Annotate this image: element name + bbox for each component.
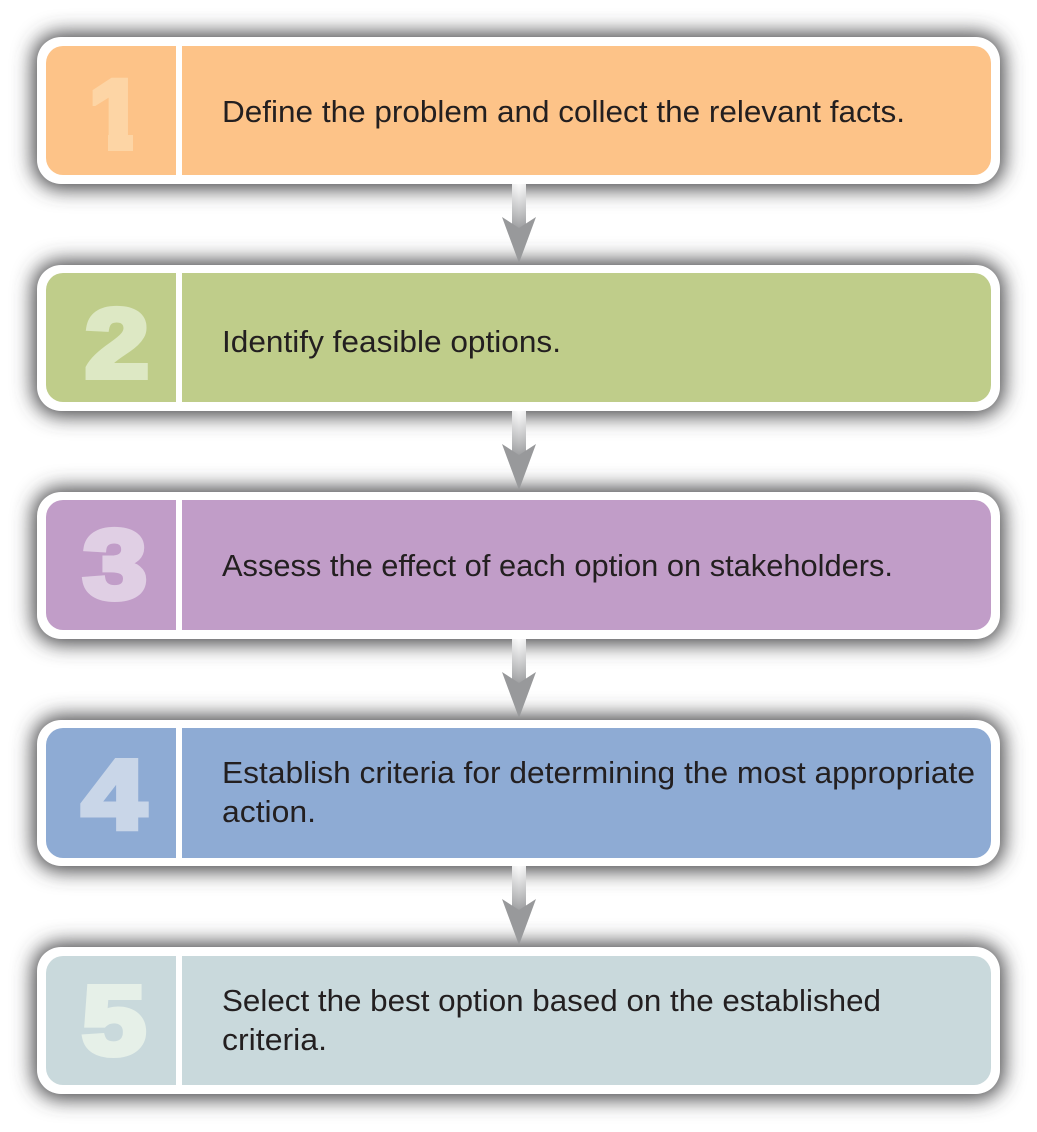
step 3 text: Assess the effect of each option on stakeholders. (222, 548, 893, 583)
step 1 panel (33, 33, 1004, 189)
step 4 number: 4 (82, 741, 146, 849)
step 1 number: 1 (89, 60, 143, 169)
step 4 text: action. (222, 794, 316, 829)
step 5 panel (33, 943, 1004, 1099)
step 3 panel (33, 488, 1004, 644)
arrow: step 4 to step 5 (502, 866, 536, 945)
step 2 panel (33, 261, 1004, 416)
step 4 text (222, 755, 975, 829)
step 5 text: criteria. (222, 1022, 327, 1057)
arrow: step 1 to step 2 (502, 184, 536, 263)
step 5 text: Select the best option based on the established (222, 983, 881, 1018)
step 4 panel (33, 716, 1004, 871)
arrow: step 2 to step 3 (502, 411, 536, 490)
step 5 number: 5 (82, 967, 146, 1075)
arrow: step 3 to step 4 (502, 639, 536, 718)
step 1 text: Define the problem and collect the relevant facts. (222, 94, 905, 129)
step 4 text: Establish criteria for determining the most appropriate (222, 755, 975, 790)
step 2 number: 2 (85, 290, 149, 398)
step 2 text: Identify feasible options. (222, 324, 561, 359)
step 3 number: 3 (83, 511, 147, 619)
step 5 text (222, 983, 881, 1057)
